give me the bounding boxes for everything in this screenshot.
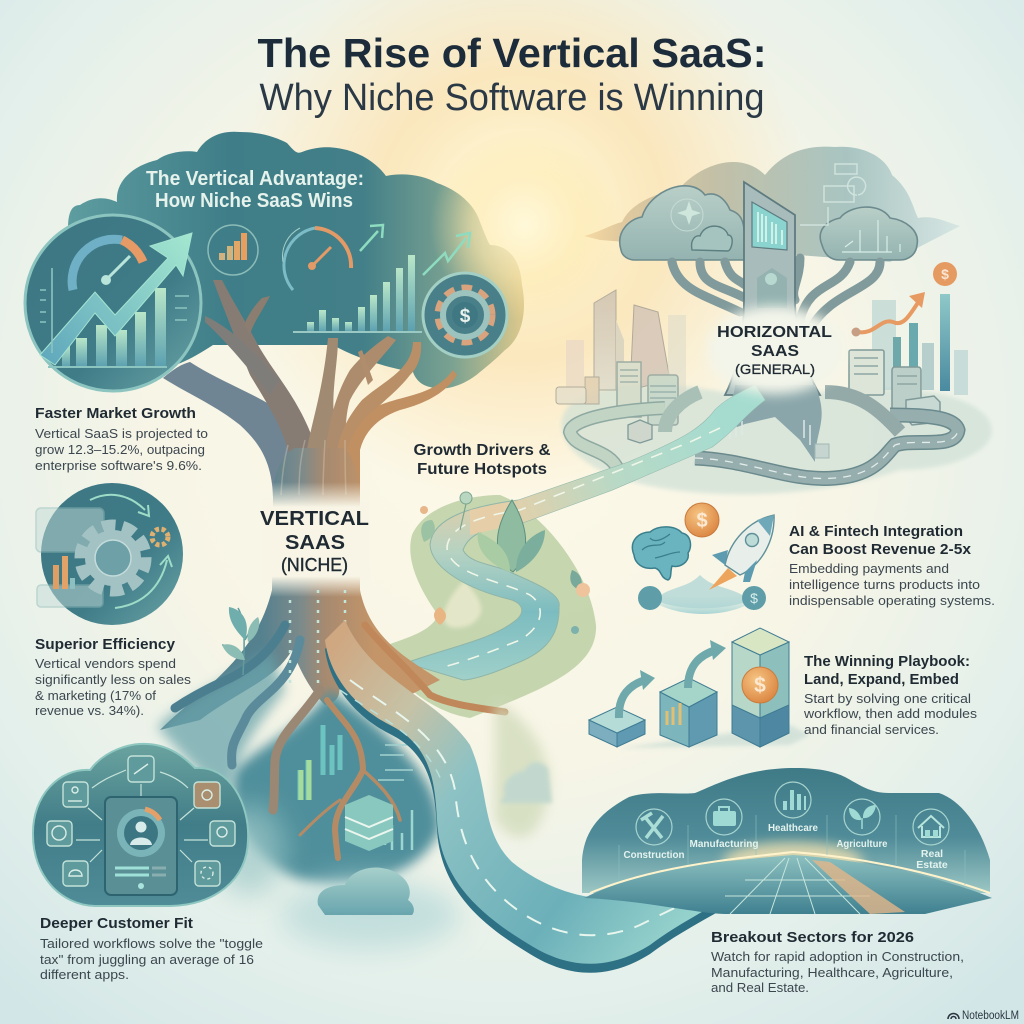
tile glyphs [52,764,227,879]
block 1 [589,707,645,747]
lane markings [350,680,745,935]
sun glow on canopy edge [430,130,620,320]
text: AI and fintech: Embedding payments and [789,561,949,576]
sector: agriculture: Agriculture [836,838,888,850]
trunk and upper flare [160,448,440,730]
text: faster market growth: enterprise software's 9.6%. [35,458,202,473]
text: deeper customer fit: Tailored workflows solve the "toggle [40,936,263,951]
growth arrow [40,233,192,365]
cream inlet [444,580,481,628]
panel: faster market growth icon [25,215,201,391]
horizon glow [723,842,863,882]
text: winning playbook: Land, Expand, Embed [804,671,959,688]
text: AI and fintech: intelligence turns products into [789,577,980,592]
sector: construction [624,809,684,861]
text: deeper customer fit: tax" from juggling an average of 16 [40,952,254,967]
coin on block: $ [754,674,766,697]
text: superior efficiency: significantly less on sales [35,672,192,687]
trunk streaks [281,440,346,495]
small servers on ground [628,420,829,458]
coin: $ [696,510,708,532]
small bar chart circle [208,225,258,275]
text: winning playbook: Start by solving one critical [804,691,971,706]
skyline bars [307,255,415,332]
arrow heads [640,640,726,690]
text: growth drivers: Future Hotspots [417,461,547,478]
base waves [655,575,750,608]
icon: AI and fintech [632,503,774,614]
trend arrows [360,225,470,275]
text: faster market growth [35,405,208,473]
text: AI and fintech: Can Boost Revenue 2-5x [789,541,972,558]
sector: real estate: Estate [916,859,948,871]
block 3 [732,628,789,747]
coin [685,503,719,537]
green roadside fringe [495,700,549,838]
rocket [709,515,774,590]
root glow field [233,690,440,885]
vertical label: VERTICAL [260,508,369,530]
orange trend arrow with coin [852,262,957,336]
text: AI and fintech [789,523,995,608]
text: superior efficiency: & marketing (17% of [35,688,156,703]
block 2 [660,678,717,747]
text: deeper customer fit: different apps. [40,967,129,982]
upper road segment [406,385,765,680]
text: superior efficiency: Superior Efficiency [35,636,176,653]
growth arrows [619,650,716,718]
small plants [420,492,590,634]
left city [556,290,686,425]
sector: healthcare [768,782,818,834]
horizontal label [717,324,832,377]
coin on block [742,667,778,703]
mini coins: $ [750,590,758,606]
branches [672,258,880,330]
app tiles [47,756,235,886]
road dashes [440,428,720,668]
text: superior efficiency: revenue vs. 34%). [35,703,144,718]
gear with dollar coin [423,273,507,357]
tower trunk [725,182,820,395]
orange trend arrow with coin: $ [941,266,949,282]
side plant [222,607,259,675]
main road to breakout sectors [325,620,790,973]
soft lower mist [280,881,460,949]
horizontal label: SAAS [751,343,799,360]
canopy heading: How Niche SaaS Wins [155,190,353,212]
canopy icons [208,225,507,357]
sector: construction: Construction [624,849,684,861]
sector: healthcare: Healthcare [768,822,818,834]
horizontal label: (GENERAL) [735,361,815,377]
sector: manufacturing [690,799,758,850]
block shadow [620,725,810,748]
text: breakout sectors: Watch for rapid adoption in Construction, [711,949,964,964]
horizontal label halo [707,306,843,394]
text: breakout sectors [711,929,964,995]
sector: manufacturing: Manufacturing [690,838,758,850]
roots [175,625,505,858]
icon: land expand embed blocks [589,628,810,748]
horizontal label: HORIZONTAL [717,324,832,341]
text: faster market growth: Faster Market Growth [35,405,196,422]
sector: real estate: Real [921,848,943,860]
connecting teal mist [215,805,285,895]
text: breakout sectors: and Real Estate. [711,980,809,995]
text: superior efficiency: Vertical vendors spend [35,656,176,671]
title: The Rise of Vertical SaaS: [258,30,766,76]
text: winning playbook: workflow, then add modules [803,706,978,721]
road shadow [325,629,790,973]
canopy heading [146,168,364,212]
tree: vertical SaaS [68,130,620,949]
mini coins [638,586,766,610]
canopy heading: The Vertical Advantage: [146,168,364,190]
panel: breakout sectors [582,768,992,914]
text: breakout sectors: Manufacturing, Healthcare, Agriculture, [711,965,953,980]
winding road: growth drivers [376,385,765,718]
floor [584,852,992,914]
clouds around road [318,762,552,915]
title [258,30,766,119]
sector: real estate [913,809,949,871]
right city [849,294,968,425]
roots and roads [570,385,958,478]
text: growth drivers [414,442,551,478]
gauge [283,228,351,290]
gear with dollar coin: $ [460,306,471,327]
vertical label [260,508,369,575]
charts in the roots [300,725,413,851]
road surface [325,620,790,964]
canopy [68,132,524,389]
text: winning playbook: and financial services. [804,722,939,737]
sector dome [582,768,990,893]
vertical label: SAAS [285,532,345,554]
left root teal field [157,650,285,790]
text: growth drivers: Growth Drivers & [414,442,551,459]
base crescent [642,590,764,614]
branches [163,280,457,497]
gauge [72,239,143,290]
text: winning playbook: The Winning Playbook: [804,653,970,670]
tile connectors [76,770,208,862]
sector: agriculture [836,799,888,850]
green land [376,495,596,718]
text: AI and fintech: AI & Fintech Integration [789,523,963,540]
text: deeper customer fit [40,915,263,982]
back cloud canopy [584,147,960,262]
bars [62,288,166,367]
text: faster market growth: grow 12.3–15.2%, outpacing [35,442,205,457]
panel: superior efficiency icon [36,483,183,625]
dividers [619,815,965,885]
network icon in back canopy [800,164,866,225]
label halo on trunk [262,482,370,597]
text: deeper customer fit: Deeper Customer Fit [40,915,193,932]
trunk dots [290,590,345,690]
text: AI and fintech: indispensable operating systems. [789,593,995,608]
horizontal SaaS scene [556,147,992,494]
title: Why Niche Software is Winning [260,77,764,119]
text: superior efficiency [35,636,192,718]
text: winning playbook [803,653,978,737]
text: faster market growth: Vertical SaaS is projected to [35,426,208,441]
vertical label: (NICHE) [281,555,348,575]
brain [632,527,690,580]
central plant [478,500,545,572]
ground island [561,385,992,494]
panel: deeper customer fit icon [33,744,248,906]
right hybrid cloud [820,207,917,260]
tablet [105,797,177,895]
text: breakout sectors: Breakout Sectors for 2026 [711,929,914,946]
left hybrid cloud [620,186,745,260]
